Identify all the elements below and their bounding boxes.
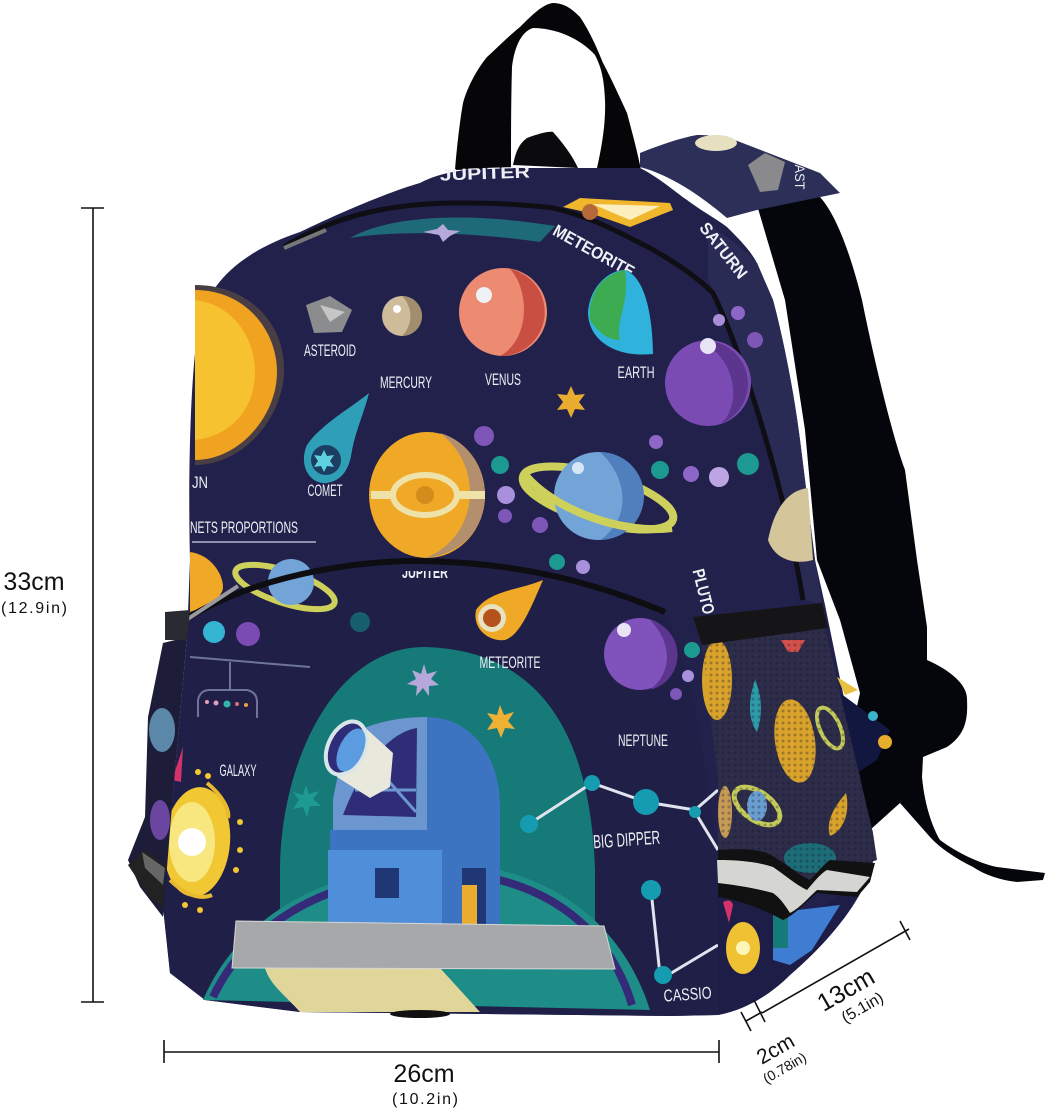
side zipper pull [168,586,238,632]
left side mesh pocket [128,610,190,917]
neptune planet [604,618,700,750]
venus [459,268,547,389]
pocket planets [203,612,370,646]
meteorite lower: METEORITE [480,653,540,672]
dimension: strap 2cm [741,1012,809,1086]
top carry handle [455,3,641,170]
mercury [380,296,432,392]
small saturn [231,556,339,618]
venus: VENUS [485,370,521,389]
purple planet upper [665,306,763,426]
comet [304,393,369,500]
pocket label jupiter: JUPITER [402,563,448,582]
star gold [557,386,585,418]
label cassiopeia: CASSIO [663,983,712,1006]
pink marker left [172,747,183,782]
top label: Jupiter: JUPITER [440,162,530,185]
section heading planets proportions [190,518,316,542]
dimension: height 33cm: (12.9in) [1,600,67,617]
mercury: MERCURY [380,373,432,392]
section heading planets proportions: NETS PROPORTIONS [190,518,298,537]
label big dipper: BIG DIPPER [592,828,661,853]
label meteorite: METEORITE [550,221,638,281]
right shoulder strap [757,190,1045,882]
comet: COMET [308,481,342,500]
front pocket [163,563,718,1016]
saturn [516,452,680,543]
telescope [318,715,393,798]
stars [293,664,515,817]
dimension: depth 13cm [754,921,910,1027]
big dipper constellation [520,775,718,984]
right planet beige [768,488,813,562]
front reflective strip [232,921,615,969]
handle base loop [513,132,578,168]
print panel on strap [837,677,892,773]
main backpack body [163,168,875,1016]
shoulder strap top: AST [792,164,808,190]
dimension: width 26cm: 26cm [393,1060,455,1088]
dimension: strap 2cm: (0.78in) [760,1049,809,1086]
pocket zipper [168,561,665,633]
label sun: JN [192,473,208,492]
dots around jupiter [474,426,759,574]
galaxy [159,761,256,913]
side mesh pocket [702,627,877,882]
side reflective band [717,849,875,920]
top teal arc and star [350,218,555,242]
galaxy: GALAXY [220,761,256,780]
small sun left [190,552,223,612]
meteorite lower [475,580,543,672]
asteroid: ASTEROID [304,341,356,360]
asteroid [304,296,356,360]
dimension: width 26cm [164,1040,719,1108]
bottom moon shape [265,968,480,1012]
dimension: strap 2cm: 2cm [753,1029,799,1069]
neptune planet: NEPTUNE [618,731,668,750]
top zipper [284,203,803,600]
observatory [318,715,500,925]
lower side panel print [718,885,862,1015]
label saturn: SATURN [696,219,751,282]
earth [588,270,654,382]
bottom foot [390,1010,450,1018]
label pluto: PLUTO [689,567,718,616]
dimension: width 26cm: (10.2in) [392,1091,458,1108]
left diagram [190,657,310,718]
sun [195,285,284,465]
shoulder strap top [640,135,840,218]
earth: EARTH [618,363,654,382]
dimension: height 33cm: 33cm [3,568,65,596]
rear side panel [708,225,822,604]
dimension: depth 13cm: (5.1in) [839,989,887,1027]
side pocket elastic top [693,603,828,645]
green dome [280,647,595,930]
bottom arcs [203,862,650,1010]
dimension: depth 13cm: 13cm [813,963,879,1017]
meteorite top [563,198,673,227]
jupiter planet [369,432,485,558]
zipper pull [284,230,326,248]
dimension: height 33cm [1,208,104,1002]
